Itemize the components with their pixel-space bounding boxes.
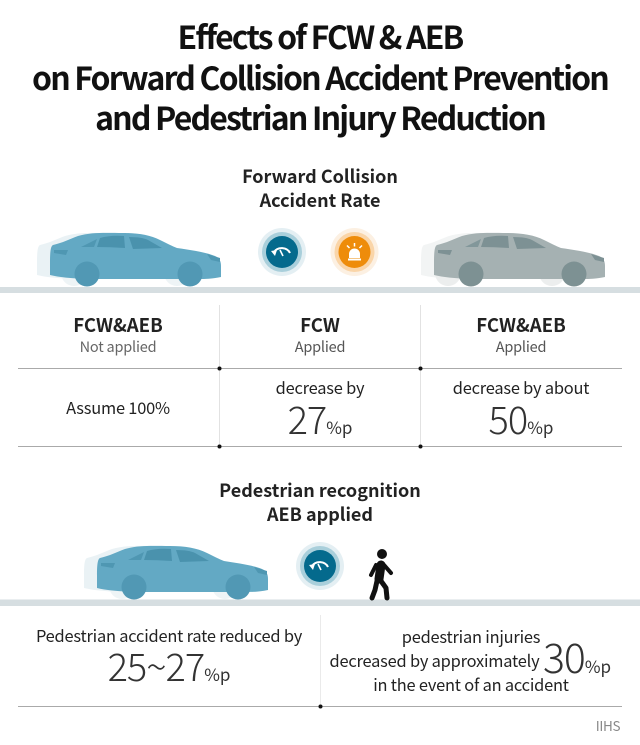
column 1 header: [73, 311, 163, 357]
column 1 header: FCW&AEB: [73, 311, 163, 338]
column 2 header: FCW: [300, 311, 340, 338]
pedestrian accident rate: [36, 623, 302, 692]
column 2 header: Applied: [295, 336, 345, 357]
column 3 value: [453, 375, 590, 445]
icon: blue car without assistance: [37, 233, 221, 286]
column 2 value: 27%p: [288, 390, 352, 445]
heading: forward collision: Accident Rate: [260, 187, 380, 213]
road: upper: [0, 287, 640, 293]
column 3 value: 50%p: [489, 390, 553, 445]
column 2 header: [294, 311, 345, 357]
column 1 value: Assume 100%: [66, 395, 170, 419]
title: Effects of FCW & AEB: [178, 13, 462, 59]
heading: forward collision: Forward Collision: [242, 163, 398, 189]
title: on Forward Collision Accident Prevention: [32, 54, 608, 100]
icon: blue car pedestrian section: [84, 546, 268, 600]
column 2 value: [276, 375, 364, 445]
heading: pedestrian: Pedestrian recognition: [219, 477, 421, 503]
title: [32, 13, 608, 140]
icon: walking pedestrian: [371, 549, 391, 598]
injuries line 2: decreased by approximately: [330, 648, 539, 672]
icon: grey car with assistance: [421, 233, 605, 286]
icon: orange alarm beacon: [330, 228, 378, 276]
icon: speedometer FCW: [258, 228, 306, 276]
heading: pedestrian: [219, 477, 421, 527]
column 3 value: decrease by about: [453, 375, 589, 399]
road: lower: [0, 600, 640, 606]
pedestrian injuries: [330, 624, 611, 696]
icon: speedometer pedestrian AEB: [296, 542, 344, 590]
column 2 value: decrease by: [276, 375, 364, 399]
column 1 header: Not applied: [80, 336, 156, 357]
title: and Pedestrian Injury Reduction: [95, 94, 545, 140]
pedestrian accident rate: Pedestrian accident rate reduced by: [36, 623, 302, 647]
column 3 header: [476, 311, 566, 357]
source: IIHS: [596, 715, 620, 735]
injuries figure: 30%p: [543, 625, 611, 685]
heading: pedestrian: AEB applied: [267, 501, 373, 527]
column 3 header: Applied: [496, 336, 546, 357]
injuries line 1: pedestrian injuries: [402, 624, 540, 648]
heading: forward collision: [242, 163, 398, 213]
pedestrian accident rate: 25~27%p: [108, 637, 230, 692]
column 3 header: FCW&AEB: [476, 311, 566, 338]
injuries line 3: in the event of an accident: [373, 672, 569, 696]
